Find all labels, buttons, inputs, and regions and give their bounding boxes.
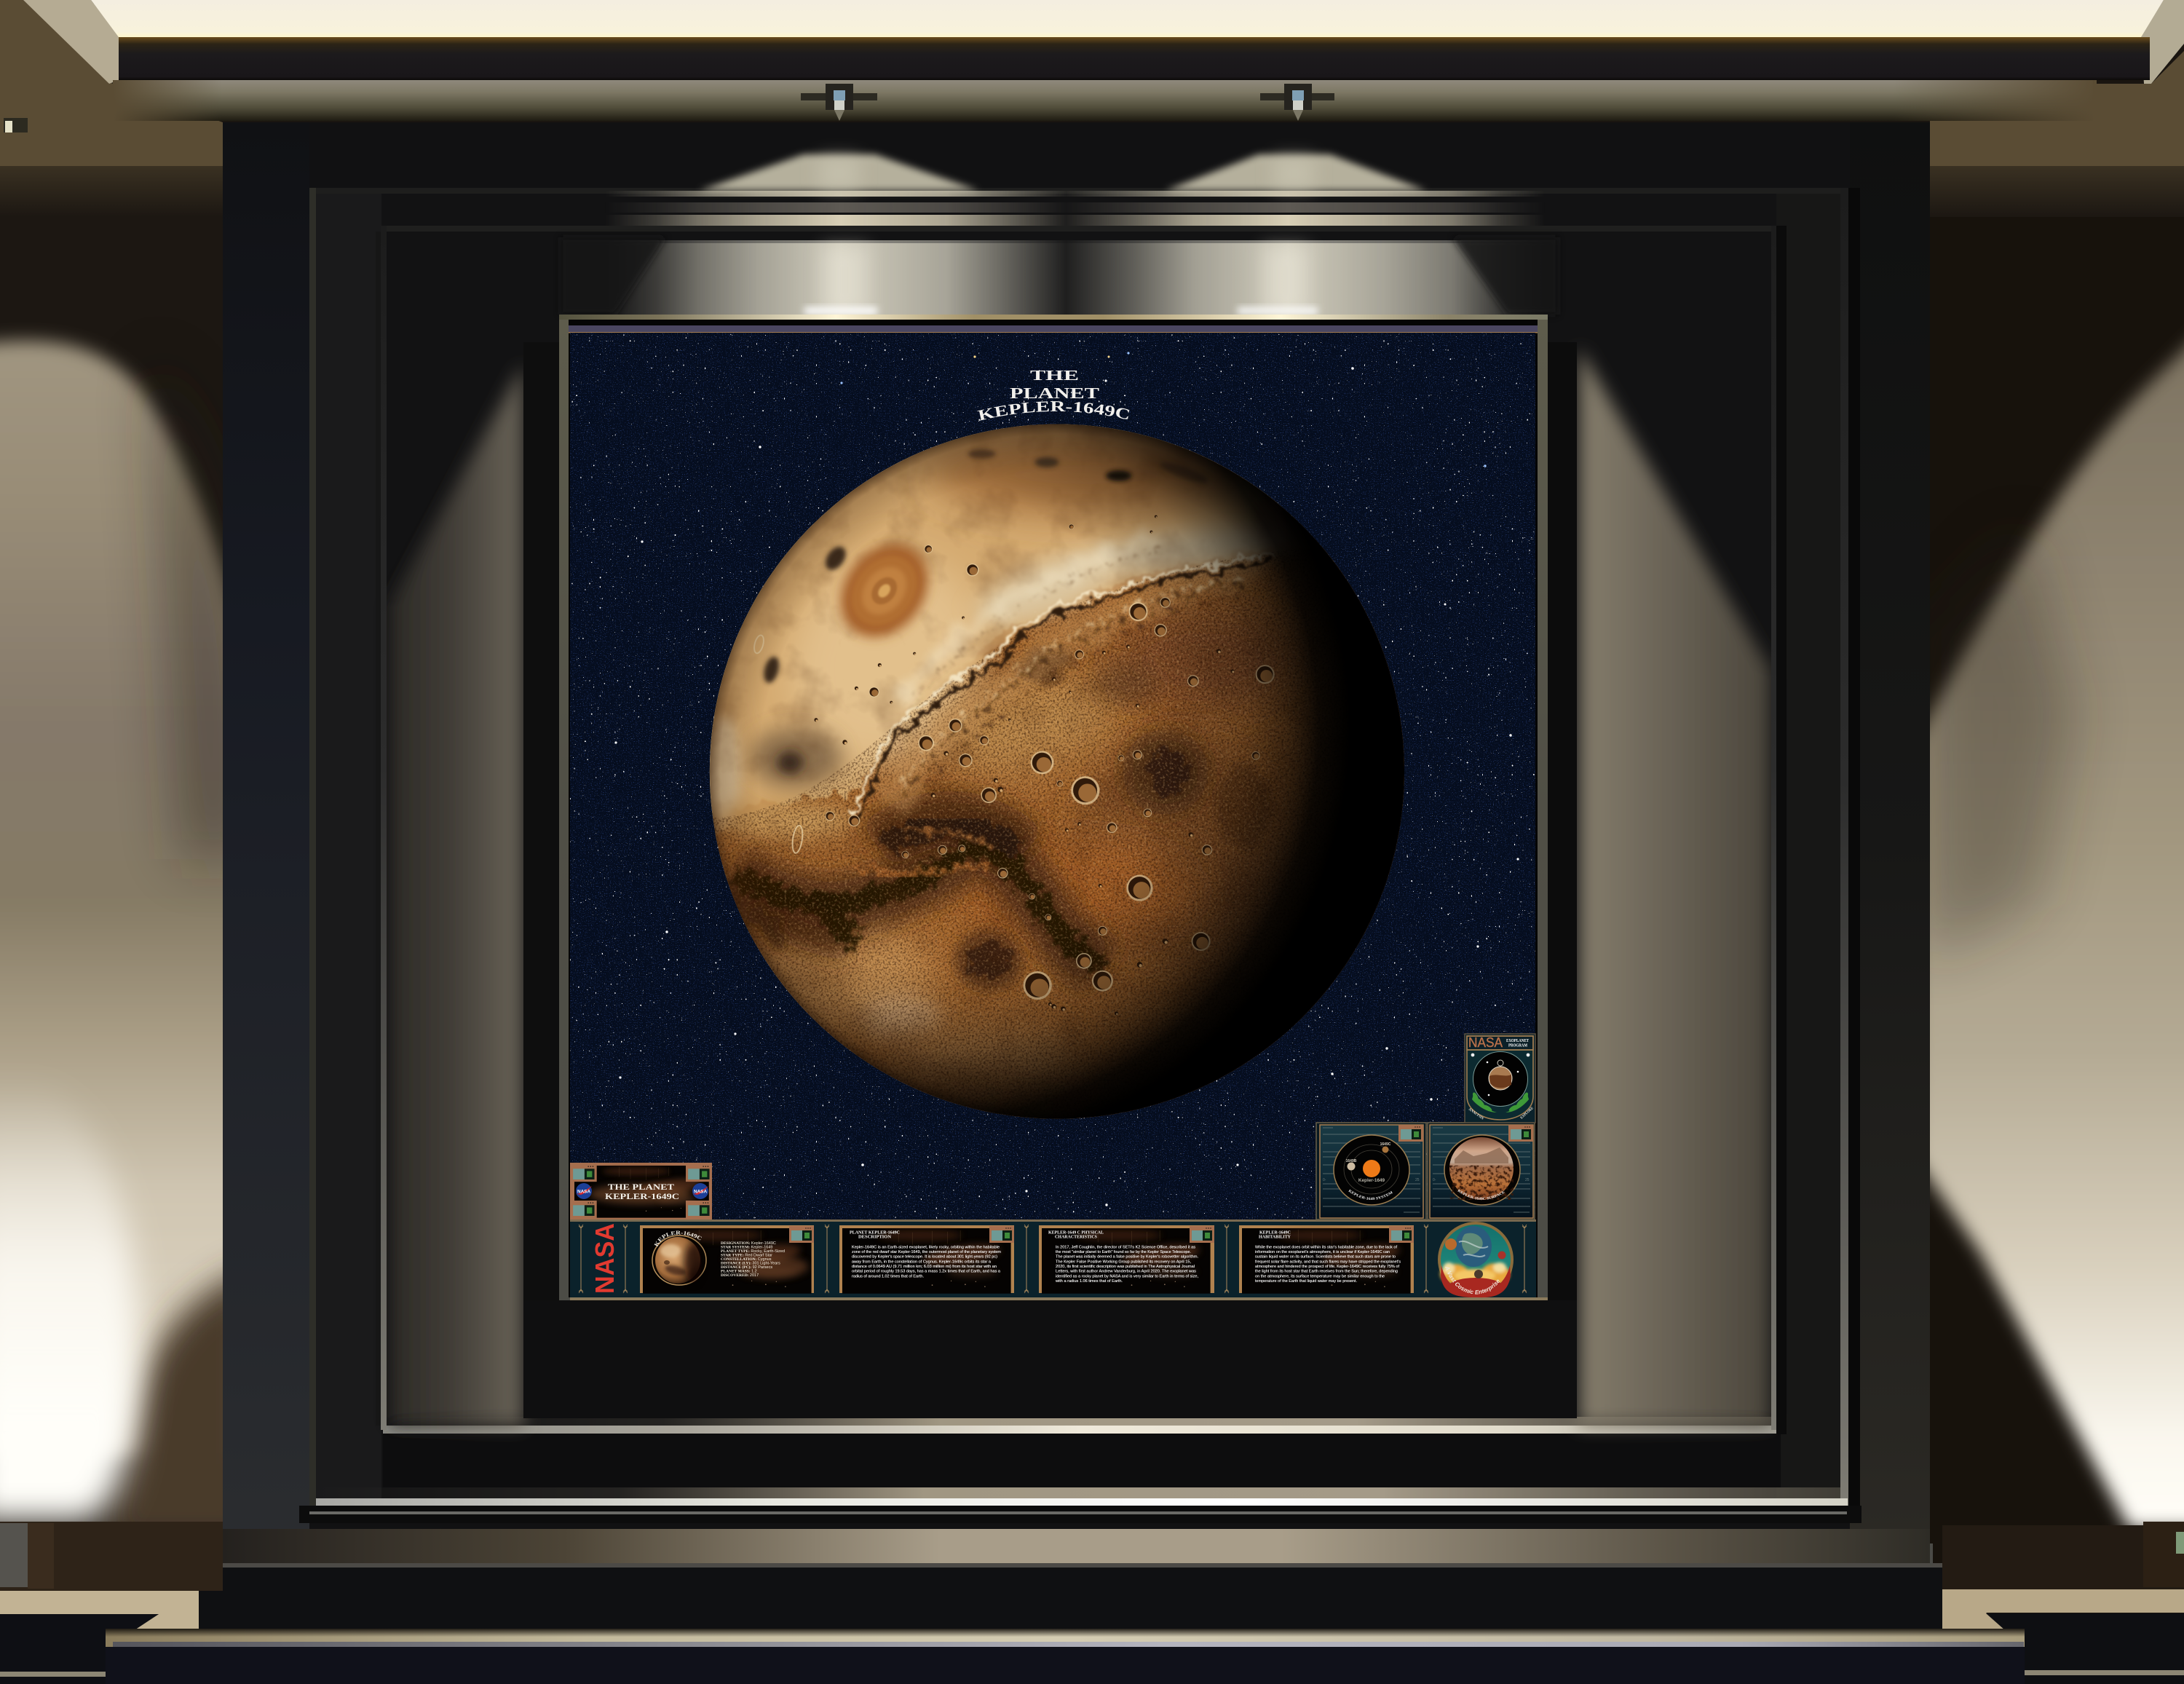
emblem motto: EXPLORE: [1520, 1107, 1535, 1120]
planet: central scarp ridge: [852, 539, 1272, 816]
axis labels: 0-: [1433, 1178, 1436, 1182]
description body: zone of the red dwarf star Kepler-1649, the outermost planet of the planetary system: [852, 1250, 1001, 1254]
emblem roundel: [1473, 1051, 1527, 1107]
habitability heading: HABITABILITY: [1259, 1235, 1291, 1239]
emblem stars: [1471, 1054, 1530, 1056]
data card facts list: [721, 1241, 785, 1278]
right wall light glow: [1915, 306, 2184, 1529]
habitability heading: [1259, 1230, 1291, 1239]
data card facts list: PLANET TYPE: Rocky, Earth-Sized: [721, 1249, 785, 1254]
characteristics body: The planet was initially deemed a false positive by Kepler's robovetter algorithm.: [1056, 1255, 1198, 1260]
planet: craters: [814, 515, 1275, 1015]
data card planet portrait: [652, 1236, 706, 1285]
info panel: description: [839, 1225, 1014, 1294]
dark framed wall panel: [223, 122, 1930, 1568]
habitability body: [1255, 1245, 1401, 1284]
habitability body: on the atmosphere, its surface temperature may be similar enough to the: [1255, 1274, 1385, 1278]
surface landscape roundel: [1444, 1135, 1520, 1205]
data card facts list: CONSTELLATION: Cygnus: [721, 1257, 772, 1262]
info panel: physical characteristics: [1039, 1225, 1214, 1294]
data card facts list: DISTANCE (PC): 92 Parsecs: [721, 1265, 772, 1270]
orbit diagram: [1334, 1135, 1409, 1205]
axis labels: [1323, 1178, 1420, 1182]
info panel: habitability: [1239, 1225, 1414, 1294]
description body: away from Earth, in the constellation of Cygnus. Kepler-1649c orbits its star a: [852, 1260, 992, 1264]
characteristics body: 2020, its first scientific description was published in The Astrophysical Journal: [1056, 1265, 1195, 1269]
data card facts list: STAR SYSTEM: Kepler-1649: [721, 1245, 772, 1249]
title: The Planet Kepler-1649C: KEPLER-1649C: [977, 401, 1130, 421]
planet: upper pale plains: [701, 424, 1286, 818]
axis labels: [1433, 1178, 1530, 1182]
planet: mottling and grain: [712, 434, 1404, 1118]
plaque title text: [605, 1183, 679, 1201]
poster frame: [523, 315, 1577, 1418]
spotlight fixture left: [801, 84, 877, 121]
panel: Kepler-1649C surface: [1428, 1123, 1535, 1219]
planet: dark valley: [733, 641, 1272, 991]
habitability body: frequent solar flare activity, and that such flares may have stripped the exoplanet's: [1255, 1260, 1401, 1264]
badge clouds: [1440, 1262, 1510, 1285]
inner moulding frame: [381, 226, 1787, 1487]
data card swoosh: [735, 1255, 808, 1278]
wall skirt band: [223, 1529, 1930, 1563]
emblem NASA wordmark: NASA: [1468, 1035, 1503, 1050]
emblem heading: PROGRAM: [1508, 1043, 1527, 1048]
info panel: planet data card: [640, 1225, 814, 1294]
panel: title plaque: [570, 1163, 712, 1219]
panel: NASA exoplanet program emblem: [1465, 1034, 1535, 1123]
data card facts list: DESIGNATION: Kepler-1649C: [721, 1241, 776, 1246]
panel: bottom information strip: [570, 1219, 1548, 1300]
data card facts list: STAR TYPE: Red Dwarf Star: [721, 1254, 772, 1258]
description body: discovered by Kepler's space telescope. It is located about 301 light-years (92 pc): [852, 1255, 997, 1260]
title: The Planet Kepler-1649C: [976, 368, 1132, 424]
emblem motto: [1468, 1107, 1535, 1121]
habitability heading: KEPLER-1649C: [1259, 1230, 1291, 1235]
characteristics body: In 2017, Jeff Coughlin, the director of SETI's K2 Science Office, described it as: [1056, 1245, 1195, 1249]
emblem heading: EXOPLANET: [1506, 1038, 1530, 1043]
data card facts list: DISCOVERED: 2017: [721, 1273, 759, 1278]
lower base block: [106, 1647, 2025, 1684]
emblem laurels: [1471, 1091, 1530, 1112]
characteristics body: with a radius 1.06 times that of Earth.: [1055, 1279, 1123, 1284]
light reflection below poster: [387, 1417, 1771, 1426]
description body: Kepler-1649C is an Earth-sized exoplanet, likely rocky, orbiting within the habitable: [852, 1245, 1000, 1249]
planet: lower rust terrain: [692, 549, 1416, 1125]
orbit diagram: 1649B: [1346, 1159, 1357, 1163]
orbit diagram: KEPLER-1649 SYSTEM: [1348, 1190, 1393, 1200]
plaque title text: KEPLER-1649C: [605, 1193, 679, 1201]
habitability body: sustain liquid water on its surface. Scientists believe that such stars are prone to: [1255, 1255, 1396, 1260]
habitability body: the light from its host star that Earth receives from the Sun; therefore, depending: [1255, 1270, 1398, 1274]
strip ornaments: [579, 1225, 1527, 1293]
axis labels: 0-: [1323, 1178, 1326, 1182]
spotlight fixture right: [1260, 84, 1334, 121]
habitability body: information on the exoplanet's atmosphere, it is unclear if Kepler-1649C can: [1255, 1250, 1390, 1254]
data card facts list: DISTANCE (LY): 301 Light-Years: [721, 1261, 780, 1265]
planet: left crater chain: [753, 634, 804, 854]
ceiling light panel: [0, 0, 2184, 166]
characteristics body: the most "similar planet to Earth" found so far by the Kepler Space Telescope.: [1056, 1250, 1191, 1254]
lit wall right of poster: [1579, 226, 1787, 1434]
characteristics body: identified as a rocky planet by NASA and is very similar to Earth in terms of size,: [1056, 1274, 1198, 1278]
data card arc title: KEPLER-1649C: [654, 1230, 702, 1247]
left wall light glow: [0, 341, 255, 1543]
plaque title text: THE PLANET: [608, 1183, 674, 1192]
chart lines: [1433, 1128, 1530, 1212]
planet: dark valley underlay: [733, 819, 1100, 967]
plinth: [199, 1543, 1942, 1629]
description heading: DESCRIPTION: [858, 1235, 891, 1239]
lit wall left of poster: [376, 226, 523, 1430]
console surfaces: [0, 1589, 2184, 1684]
title: The Planet Kepler-1649C: PLANET: [1010, 384, 1099, 402]
description body: [852, 1245, 1001, 1278]
planet: storm swirl: [823, 527, 946, 655]
description heading: [850, 1230, 900, 1239]
data card facts list: PLANET MASS: 1.2: [721, 1270, 757, 1274]
emblem motto: ANALYSIS: [1468, 1108, 1484, 1121]
habitability body: atmosphere and hindered the prospect of life. Kepler-1649C receives fully 75% of: [1255, 1265, 1399, 1269]
habitability body: temperature of the Earth that liquid water may be present.: [1255, 1279, 1357, 1284]
title: The Planet Kepler-1649C: THE: [1030, 368, 1079, 384]
planet: limb and terminator shadow: [692, 400, 1420, 1128]
description body: orbital period of roughly 19.53 days, has a mass 1.2x times that of Earth, and has a: [852, 1270, 1001, 1274]
outer moulding frame: [299, 188, 1861, 1523]
emblem heading: [1506, 1038, 1530, 1048]
badge motto: A Vast Cosmic Enterprise: [1445, 1267, 1500, 1294]
side sconce left: [0, 1522, 223, 1591]
surface landscape roundel: KEPLER-1649C SURFACE: [1457, 1189, 1505, 1200]
description body: distance of 0.0649 AU (9.71 million km; 6.03 million mi) from its host star with an: [852, 1265, 997, 1269]
round badge: cosmic enterprise: [1438, 1222, 1514, 1297]
orbit diagram: Kepler-1649: [1358, 1178, 1385, 1183]
bright stars: [614, 352, 1519, 1206]
characteristics heading: CHARACTERISTICS: [1055, 1235, 1097, 1239]
characteristics body: Letters, with first author Andrew Vanderburg, in April 2020. The exoplanet was: [1056, 1270, 1196, 1274]
orbit diagram: 1649C: [1380, 1142, 1391, 1147]
planet Kepler-1649C: [692, 400, 1420, 1128]
planet: shading patches: [708, 435, 1306, 1092]
description heading: PLANET KEPLER-1649C: [850, 1230, 900, 1235]
characteristics body: The Kepler False Positive Working Group published its recovery on April 15,: [1056, 1260, 1191, 1264]
spotlight beams on upper moulding: [561, 154, 1558, 315]
characteristics heading: KEPLER-1649 C PHYSICAL: [1048, 1230, 1104, 1235]
side sconce right: [1942, 1522, 2184, 1592]
planet: dark spots: [761, 449, 1210, 684]
lit ledge under plinth: [106, 1629, 2025, 1647]
plaque swoosh: [590, 1184, 692, 1204]
plaque corner tabs: [571, 1164, 712, 1218]
description body: radius of around 1.02 times that of Earth.: [852, 1274, 924, 1278]
axis labels: 25: [1525, 1178, 1530, 1182]
badge red ribbon: [1441, 1265, 1511, 1297]
habitability body: While the exoplanet does orbit within its star's habitable zone, due to the lack of: [1255, 1245, 1397, 1249]
NASA emblems: [576, 1183, 708, 1199]
NASA worm logo: NASA: [590, 1223, 620, 1294]
star field background: [570, 333, 1535, 1219]
badge earth: [1455, 1226, 1492, 1267]
characteristics body: [1055, 1245, 1198, 1284]
characteristics heading: [1048, 1230, 1104, 1239]
badge small planets: [1445, 1238, 1506, 1278]
chart lines: [1323, 1128, 1420, 1212]
panel: Kepler-1649 system diagram: [1316, 1123, 1426, 1219]
axis labels: 25: [1415, 1178, 1420, 1182]
small fixture on left wall: [4, 118, 28, 133]
